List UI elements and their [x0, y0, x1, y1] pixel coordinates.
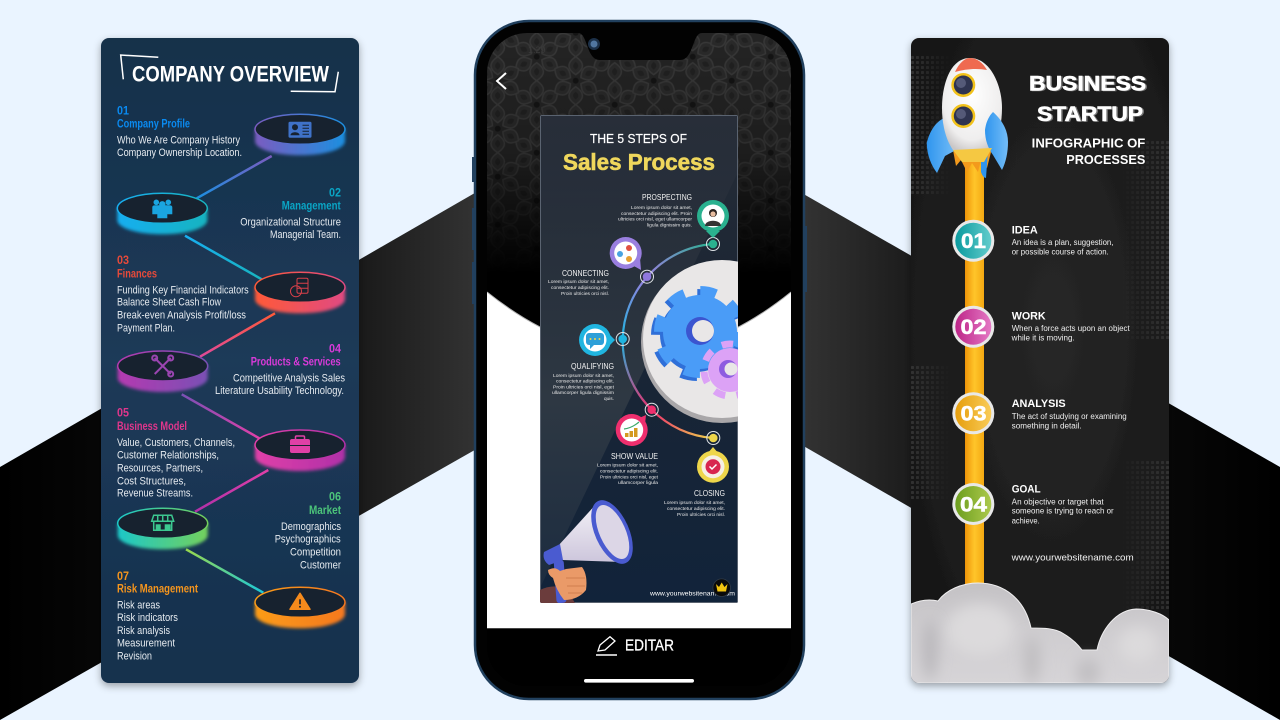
step 04 text: Products & Services	[251, 357, 341, 369]
step 02 work: while it is moving.	[1011, 334, 1075, 343]
step 05 text: Cost Structures,	[117, 475, 186, 487]
step 05 text: Resources, Partners,	[117, 463, 203, 475]
disc 3 with coins icon	[255, 272, 345, 313]
step: prospecting	[618, 193, 729, 250]
step 06 text: Psychographics	[275, 534, 341, 546]
step 01 text: Who We Are Company History	[117, 134, 240, 146]
step 01 text	[117, 103, 242, 159]
step: closing: Proin ultricies orci nisl.	[677, 512, 725, 517]
step 05 text: 05	[117, 406, 129, 420]
title: business startup: BUSINESS	[1030, 73, 1148, 96]
step: qualifying: Proin ultricies orci nisl, eget	[553, 384, 615, 390]
disc 6 with store icon	[118, 508, 208, 549]
step: show value: SHOW VALUE	[611, 452, 658, 461]
step: qualifying: quis.	[604, 396, 614, 401]
step 03 text: Finances	[117, 268, 157, 280]
step 06 text: Market	[309, 505, 341, 517]
disc 7 with warning icon	[255, 587, 345, 628]
step 07 text: Risk Management	[117, 584, 198, 596]
step 07 text: Risk analysis	[117, 625, 170, 637]
title: business startup: STARTUP	[1038, 104, 1144, 126]
step 02 text	[240, 186, 341, 241]
step 07 text: 07	[117, 569, 129, 583]
step 01 idea: or possible course of action.	[1012, 247, 1109, 256]
step 05 text: Revenue Streams.	[117, 488, 193, 500]
step 01 text: 01	[117, 103, 129, 117]
step 01 idea: 01	[961, 230, 986, 253]
step 07 text: Measurement	[117, 638, 175, 650]
megaphone with hand	[540, 500, 633, 603]
white editor area	[487, 292, 791, 628]
title: business startup	[1029, 73, 1148, 167]
title: business startup: STARTUP	[1037, 103, 1143, 126]
halftone dots	[911, 55, 1169, 610]
step: prospecting: consectetur adipiscing elit. Proin	[621, 211, 692, 216]
home indicator	[584, 679, 694, 683]
step: closing: CLOSING	[694, 489, 725, 498]
heading: company overview	[121, 55, 338, 92]
step 02 text: Organizational Structure	[240, 216, 341, 228]
step 04 goal	[952, 483, 1114, 525]
step 07 text: Risk indicators	[117, 612, 178, 624]
step: connecting: consectetur adipiscing elit.	[551, 285, 609, 290]
pink gear	[700, 340, 738, 399]
panel: business startup	[911, 38, 1169, 686]
step 06 text: 06	[329, 490, 341, 504]
step 01 text: Company Profile	[117, 118, 190, 130]
step 07 text: Revision	[117, 650, 152, 662]
rocket exhaust bar	[965, 155, 984, 587]
crown badge	[713, 579, 730, 596]
step 01 text: Company Ownership Location.	[117, 147, 242, 159]
step: show value: Proin ultricies orci nisl, eget	[600, 474, 659, 480]
connector lines	[182, 156, 275, 593]
step: closing: Lorem ipsum dolor sit amet,	[664, 500, 725, 505]
step: show value: Lorem ipsum dolor sit amet,	[597, 462, 658, 468]
website url: www.yourwebsitename.com	[1011, 553, 1134, 564]
notch and camera	[578, 33, 702, 60]
step 05 text	[117, 406, 235, 500]
heading: company overview: COMPANY OVERVIEW	[132, 62, 329, 87]
ornamental header pattern	[487, 33, 791, 252]
step 02 work: When a force acts upon an object	[1012, 324, 1130, 333]
step 03 text	[117, 253, 249, 334]
step 03 text: Payment Plan.	[117, 322, 175, 334]
step 07 text: Risk areas	[117, 600, 160, 612]
step 01 idea	[952, 220, 1113, 262]
step: show value: ullamcorper ligula	[618, 480, 658, 485]
step 03 analysis: something in detail.	[1012, 421, 1082, 430]
bottom bar	[487, 628, 791, 686]
step: prospecting: ligula dignissim quis.	[647, 223, 692, 228]
step 05 text: Business Model	[117, 421, 187, 433]
panel: company overview	[101, 38, 359, 683]
step 05 text: Value, Customers, Channels,	[117, 437, 235, 449]
step: show value	[597, 403, 659, 485]
step 04 text	[215, 342, 345, 397]
clouds	[911, 583, 1169, 686]
step: prospecting: Lorem ipsum dolor sit amet,	[631, 205, 692, 210]
disc 4 with tools icon	[118, 351, 208, 392]
card heading	[563, 134, 714, 170]
step 06 text: Customer	[300, 559, 341, 571]
black diagonal band right	[800, 192, 1280, 720]
step: qualifying: consectetur adipiscing elit.	[556, 378, 614, 384]
step 02 text: 02	[329, 186, 341, 200]
step 03 text: Balance Sheet Cash Flow	[117, 297, 221, 309]
step 02 text: Management	[282, 200, 341, 212]
title: business startup: PROCESSES	[1066, 152, 1146, 167]
step: qualifying: ullamcorper ligula dignissim	[552, 390, 614, 395]
step 04 goal: GOAL	[1012, 484, 1041, 496]
step: connecting: Proin ultricies orci nisl.	[561, 291, 609, 296]
step 03 analysis: ANALYSIS	[1012, 398, 1066, 410]
card: sales process	[540, 115, 738, 603]
step 04 text: 04	[329, 342, 341, 356]
step 06 text: Competition	[290, 547, 341, 559]
editar button	[596, 637, 674, 655]
step 01 idea: An idea is a plan, suggestion,	[1012, 238, 1113, 247]
step 03 analysis: 03	[960, 403, 986, 426]
step 02 text: Managerial Team.	[270, 229, 341, 241]
step 04 goal: An objective or target that	[1012, 497, 1104, 506]
step: connecting	[548, 237, 654, 296]
black diagonal band left	[0, 190, 480, 720]
step: connecting: Lorem ipsum dolor sit amet,	[548, 279, 609, 284]
gear disc	[641, 260, 738, 423]
back arrow	[497, 73, 506, 89]
step 04 goal: someone is trying to reach or	[1012, 507, 1114, 516]
step 06 text	[275, 490, 341, 571]
card heading: THE 5 STEPS OF	[590, 131, 687, 146]
step 06 text: Demographics	[281, 521, 341, 533]
title: business startup: INFOGRAPHIC OF	[1032, 135, 1145, 150]
step 04 goal: 04	[960, 493, 987, 516]
step: closing: consectetur adipiscing elit.	[667, 506, 725, 511]
step 05 text: Customer Relationships,	[117, 450, 219, 462]
phone body	[475, 21, 804, 699]
step 03 text: Break-even Analysis Profit/loss	[117, 310, 246, 322]
card heading: Sales Process	[563, 149, 715, 175]
step: qualifying: QUALIFYING	[571, 362, 614, 371]
title: business startup: BUSINESS	[1029, 73, 1146, 96]
step: show value: consectetur adipiscing elit.	[600, 468, 658, 474]
step 04 text: Literature Usability Technology.	[215, 385, 344, 397]
rocket	[927, 58, 1008, 178]
step 02 work: WORK	[1012, 310, 1046, 322]
step: prospecting: PROSPECTING	[642, 193, 692, 202]
status time: 1:29	[528, 45, 546, 55]
step 02 work: 02	[960, 316, 986, 339]
phone side buttons	[472, 157, 807, 304]
phone mockup	[472, 21, 807, 699]
website url: www.yourwebsitename.com	[649, 592, 735, 598]
step 03 analysis	[952, 392, 1127, 434]
step: qualifying	[552, 324, 629, 401]
step: closing	[664, 432, 729, 517]
step 07 text	[117, 569, 198, 662]
disc 2 with team icon	[117, 193, 207, 234]
step 04 goal: achieve.	[1012, 516, 1040, 525]
step: connecting: CONNECTING	[562, 269, 609, 278]
phone screen	[487, 33, 791, 686]
step 03 text: Funding Key Financial Indicators	[117, 284, 249, 296]
step 03 analysis: The act of studying or examining	[1012, 412, 1127, 421]
timeline arc	[623, 244, 713, 438]
blue gear	[656, 291, 741, 376]
step 03 text: 03	[117, 253, 129, 267]
step 01 idea: IDEA	[1012, 224, 1038, 236]
step 02 work	[952, 306, 1130, 348]
step 04 text: Competitive Analysis Sales	[233, 373, 345, 385]
disc 1 with id card icon	[255, 114, 345, 155]
editar button: EDITAR	[625, 638, 674, 655]
step: prospecting: ultricies orci nisl, eget ullamcorper	[618, 217, 693, 222]
disc 5 with briefcase icon	[255, 430, 345, 471]
step: qualifying: Lorem ipsum dolor sit amet,	[553, 373, 614, 378]
